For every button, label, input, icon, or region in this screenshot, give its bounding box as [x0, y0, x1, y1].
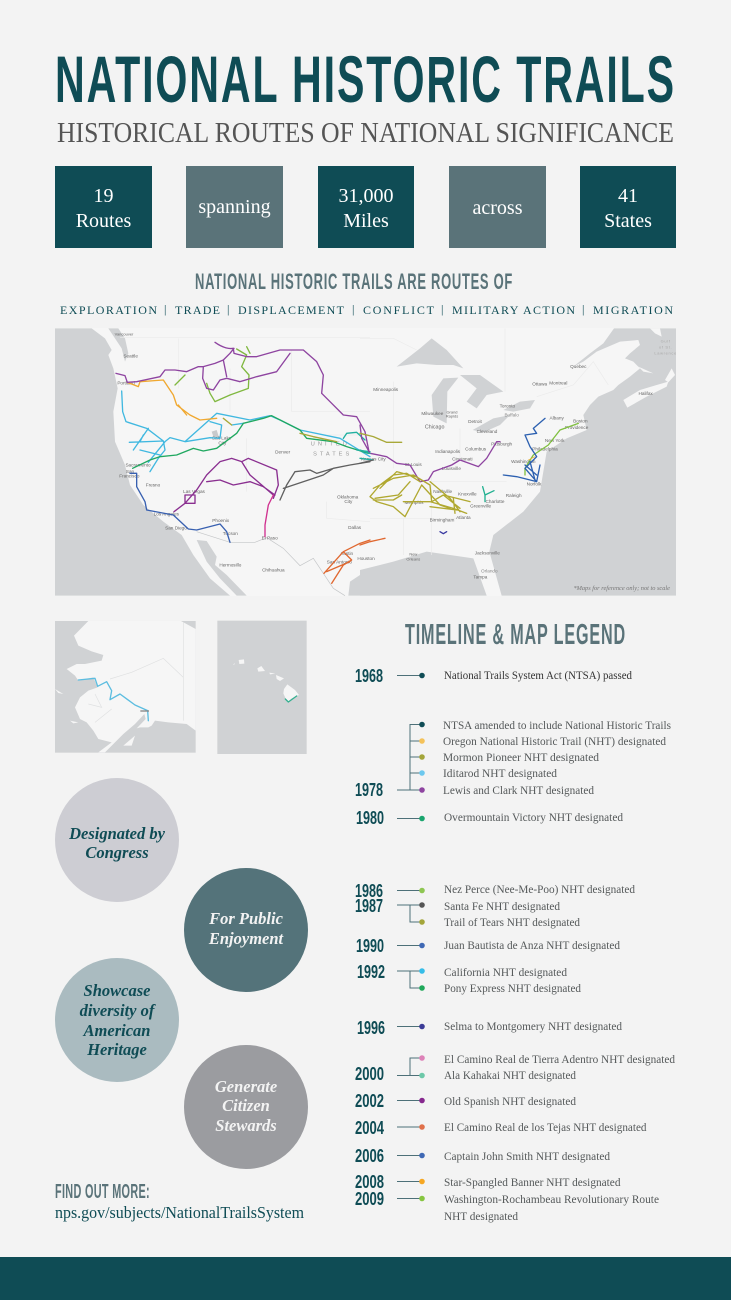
western half of map: Las Vegas — [183, 489, 206, 494]
eastern half of map: Charlotte — [486, 499, 505, 504]
circle: Generate Citizen Stewards: Stewards — [215, 1116, 277, 1135]
circle: Showcase diversity: diversity of — [80, 1001, 156, 1020]
1992 — [357, 962, 581, 995]
1996: 1996 — [357, 1018, 385, 1038]
1992: 1992 — [357, 962, 385, 982]
circle: For Public Enjoyment: For Public — [208, 909, 284, 928]
2004 — [355, 1118, 647, 1138]
western half of map: Dallas — [348, 525, 362, 530]
route categories: CONFLICT — [363, 303, 435, 317]
western half of map: Austin — [340, 551, 354, 556]
1968: National Trails System Act (NTSA) passed — [444, 670, 632, 682]
eastern half of map: Tampa — [473, 574, 488, 579]
eastern half of map: Washington — [511, 459, 536, 464]
circle: Designated by Congress: Designated by — [68, 824, 166, 843]
eastern half of map: Pittsburgh — [491, 441, 513, 446]
1978: NTSA amended to include National Historic Trails — [443, 720, 672, 732]
circle: Showcase diversity: American — [83, 1021, 150, 1040]
western half of map: Denver — [275, 449, 291, 454]
circle: Generate Citizen Stewards: Citizen — [222, 1096, 270, 1115]
footer band — [0, 1257, 731, 1300]
eastern half of map: Detroit — [468, 419, 483, 424]
1986: Nez Perce (Nee-Me-Poo) NHT designated — [444, 884, 635, 896]
eastern half of map: Chicago — [425, 425, 444, 431]
1980: 1980 — [356, 808, 384, 828]
eastern half of map: Rapids — [446, 414, 458, 419]
eastern half of map: Albany — [550, 415, 564, 420]
decorative purpose circles — [55, 778, 308, 1169]
route categories: DISPLACEMENT — [238, 303, 345, 317]
route categories: | — [582, 302, 584, 316]
western half of map: Los Angeles — [154, 512, 180, 517]
eastern half of map: Louisville — [442, 466, 461, 471]
western half of map: Francisco — [119, 474, 140, 479]
1986 — [355, 881, 635, 901]
1978: Lewis and Clark NHT designated — [443, 785, 594, 797]
eastern half of map: New York — [545, 438, 565, 443]
1990: Juan Bautista de Anza NHT designated — [444, 940, 620, 952]
eastern half of map: Orleans — [406, 556, 420, 561]
eastern half of map: Greenville — [470, 503, 492, 508]
circle: Showcase diversity: Showcase — [84, 981, 150, 1000]
stat: 31,000 miles: Miles — [343, 210, 389, 232]
eastern half of map: Jacksonville — [475, 550, 500, 555]
western half of map: UNITED — [311, 441, 350, 447]
eastern half of map: Boston — [573, 419, 588, 424]
route categories: TRADE — [175, 303, 220, 317]
connector word: spanning: spanning — [198, 196, 271, 218]
route categories: EXPLORATION — [60, 303, 157, 317]
inset map: Hawaii — [217, 621, 307, 754]
1987: Santa Fe NHT designated — [444, 901, 560, 913]
2009 — [355, 1189, 659, 1223]
eastern half of map: Orlando — [481, 568, 498, 573]
1987: 1987 — [355, 896, 383, 916]
find out more — [55, 1181, 304, 1222]
stat: 41 states: 41 — [618, 185, 638, 207]
circle: Generate Citizen Stewards — [184, 1045, 308, 1169]
stat: 19 routes: Routes — [76, 210, 131, 232]
western half of map: Hermosillo — [219, 563, 242, 568]
eastern half of map: Halifax — [639, 391, 653, 396]
1978 — [355, 720, 672, 800]
eastern half of map: Minneapolis — [373, 387, 399, 392]
route categories: MILITARY ACTION — [452, 303, 575, 317]
2006: 2006 — [355, 1146, 384, 1166]
eastern half of map: *Maps for reference only; not to scale — [573, 585, 670, 592]
1996 — [357, 1018, 622, 1038]
stat: 31,000 miles — [318, 166, 414, 248]
western half of map: Salt Lake — [212, 436, 232, 441]
western half of map: El Paso — [262, 536, 278, 541]
eastern half of map: of St. — [659, 344, 672, 349]
2002: 2002 — [355, 1091, 384, 1111]
stat: 41 states: States — [604, 210, 652, 232]
eastern half of map: Houston — [357, 556, 375, 561]
route categories: MIGRATION — [593, 303, 673, 317]
western half of map: Chihuahua — [262, 567, 285, 572]
2000: 2000 — [355, 1064, 384, 1084]
eastern half of map: Kansas City — [361, 456, 386, 461]
western half of map: Phoenix — [212, 518, 230, 523]
eastern half of map: Indianapolis — [435, 449, 461, 454]
circle: For Public Enjoyment: Enjoyment — [208, 929, 284, 948]
1992: California NHT designated — [444, 967, 567, 979]
find out more: FIND OUT MORE: — [55, 1181, 150, 1203]
route categories: | — [352, 302, 354, 316]
eastern half of map: New — [409, 552, 417, 557]
find out more: nps.gov/subjects/NationalTrailsSystem — [55, 1203, 304, 1222]
western half of map: San Diego — [165, 526, 187, 531]
1996: Selma to Montgomery NHT designated — [444, 1021, 622, 1033]
eastern half of map: Norfolk — [527, 482, 542, 487]
eastern half of map: Philadelphia — [532, 447, 558, 452]
western half of map: Sacramento — [125, 463, 151, 468]
stat: 31,000 miles: 31,000 — [338, 185, 394, 207]
stat: 41 states — [580, 166, 676, 248]
eastern half of map: Toronto — [500, 403, 516, 408]
eastern half of map: Quebec — [570, 364, 587, 369]
eastern half of map — [357, 328, 677, 596]
western half of map: San — [126, 469, 135, 474]
western half of map: Portland — [117, 380, 135, 385]
2006 — [355, 1146, 610, 1166]
2002: Old Spanish NHT designated — [444, 1096, 576, 1108]
timeline — [355, 666, 675, 1223]
circle: Generate Citizen Stewards: Generate — [215, 1077, 277, 1096]
route categories — [60, 302, 673, 317]
connector word: across: across — [473, 197, 523, 219]
stat boxes — [55, 166, 676, 248]
1987 — [355, 896, 580, 929]
circle: For Public Enjoyment — [184, 868, 308, 992]
1978: Oregon National Historic Trail (NHT) designated — [443, 736, 666, 748]
2008: Star-Spangled Banner NHT designated — [444, 1177, 621, 1189]
1990: 1990 — [356, 936, 384, 956]
1978: 1978 — [355, 780, 383, 800]
connector word: spanning — [186, 166, 283, 248]
western half of map: City — [218, 440, 227, 445]
stat: 19 routes — [55, 166, 152, 248]
western half of map: STATES — [313, 451, 352, 457]
2002 — [355, 1091, 576, 1111]
1992: Pony Express NHT designated — [444, 983, 581, 995]
eastern half of map: Memphis — [405, 500, 424, 505]
2009: NHT designated — [444, 1211, 518, 1223]
eastern half of map: Birmingham — [430, 517, 455, 522]
route categories: | — [441, 302, 443, 316]
western half of map: San Antonio — [327, 560, 352, 565]
eastern half of map: Grand — [446, 409, 458, 414]
main US trails map — [55, 328, 677, 596]
circle: Showcase diversity: Heritage — [86, 1040, 147, 1059]
western half of map: Oklahoma — [337, 494, 359, 499]
routes heading: NATIONAL HISTORIC TRAILS ARE ROUTES OF — [195, 269, 513, 294]
western half of map — [55, 328, 370, 596]
1978: Mormon Pioneer NHT designated — [443, 752, 599, 764]
1968 — [355, 666, 632, 686]
circle: Showcase diversity — [55, 958, 179, 1082]
circle: Designated by Congress — [55, 778, 179, 902]
2009: 2009 — [355, 1189, 384, 1209]
eastern half of map: Providence — [565, 425, 589, 430]
2006: Captain John Smith NHT designated — [444, 1151, 610, 1163]
1986: 1986 — [355, 881, 383, 901]
circle: Designated by Congress: Congress — [85, 843, 149, 862]
2009: Washington-Rochambeau Revolutionary Route — [444, 1194, 659, 1206]
1968: 1968 — [355, 666, 383, 686]
western half of map: Fresno — [146, 483, 161, 488]
inset map: Alaska — [55, 621, 196, 753]
1980: Overmountain Victory NHT designated — [444, 812, 623, 824]
eastern half of map: Buffalo — [504, 413, 519, 418]
eastern half of map: Lawrence — [654, 350, 677, 355]
eastern half of map: Nashville — [433, 489, 453, 494]
eastern half of map: Raleigh — [506, 493, 522, 498]
eastern half of map: Knoxville — [458, 491, 477, 496]
2008: 2008 — [355, 1172, 384, 1192]
eastern half of map: Columbus — [465, 447, 487, 452]
eastern half of map: Ottawa — [532, 381, 547, 386]
1987: Trail of Tears NHT designated — [444, 917, 580, 929]
connector word: across — [449, 166, 546, 248]
1978: Iditarod NHT designated — [443, 768, 557, 780]
2000 — [355, 1054, 675, 1084]
1980 — [356, 808, 623, 828]
eastern half of map: Cincinnati — [452, 456, 473, 461]
2004: El Camino Real de los Tejas NHT designated — [444, 1122, 647, 1134]
2004: 2004 — [355, 1118, 384, 1138]
western half of map: Seattle — [123, 354, 138, 359]
eastern half of map: Milwaukee — [421, 411, 444, 416]
1990 — [356, 936, 620, 956]
route categories: | — [164, 302, 166, 316]
eastern half of map: Atlanta — [456, 515, 471, 520]
western half of map: City — [344, 499, 353, 504]
eastern half of map: Montreal — [549, 380, 567, 385]
western half of map: Tucson — [223, 531, 238, 536]
2000: El Camino Real de Tierra Adentro NHT designated — [444, 1054, 675, 1066]
2008 — [355, 1172, 621, 1192]
2000: Ala Kahakai NHT designated — [444, 1070, 576, 1082]
eastern half of map: St Louis — [405, 462, 422, 467]
eastern half of map: Cleveland — [477, 429, 498, 434]
route categories: | — [227, 302, 229, 316]
stat: 19 routes: 19 — [94, 185, 114, 207]
western half of map: Vancouver — [115, 332, 134, 337]
eastern half of map: Gulf — [661, 338, 671, 343]
